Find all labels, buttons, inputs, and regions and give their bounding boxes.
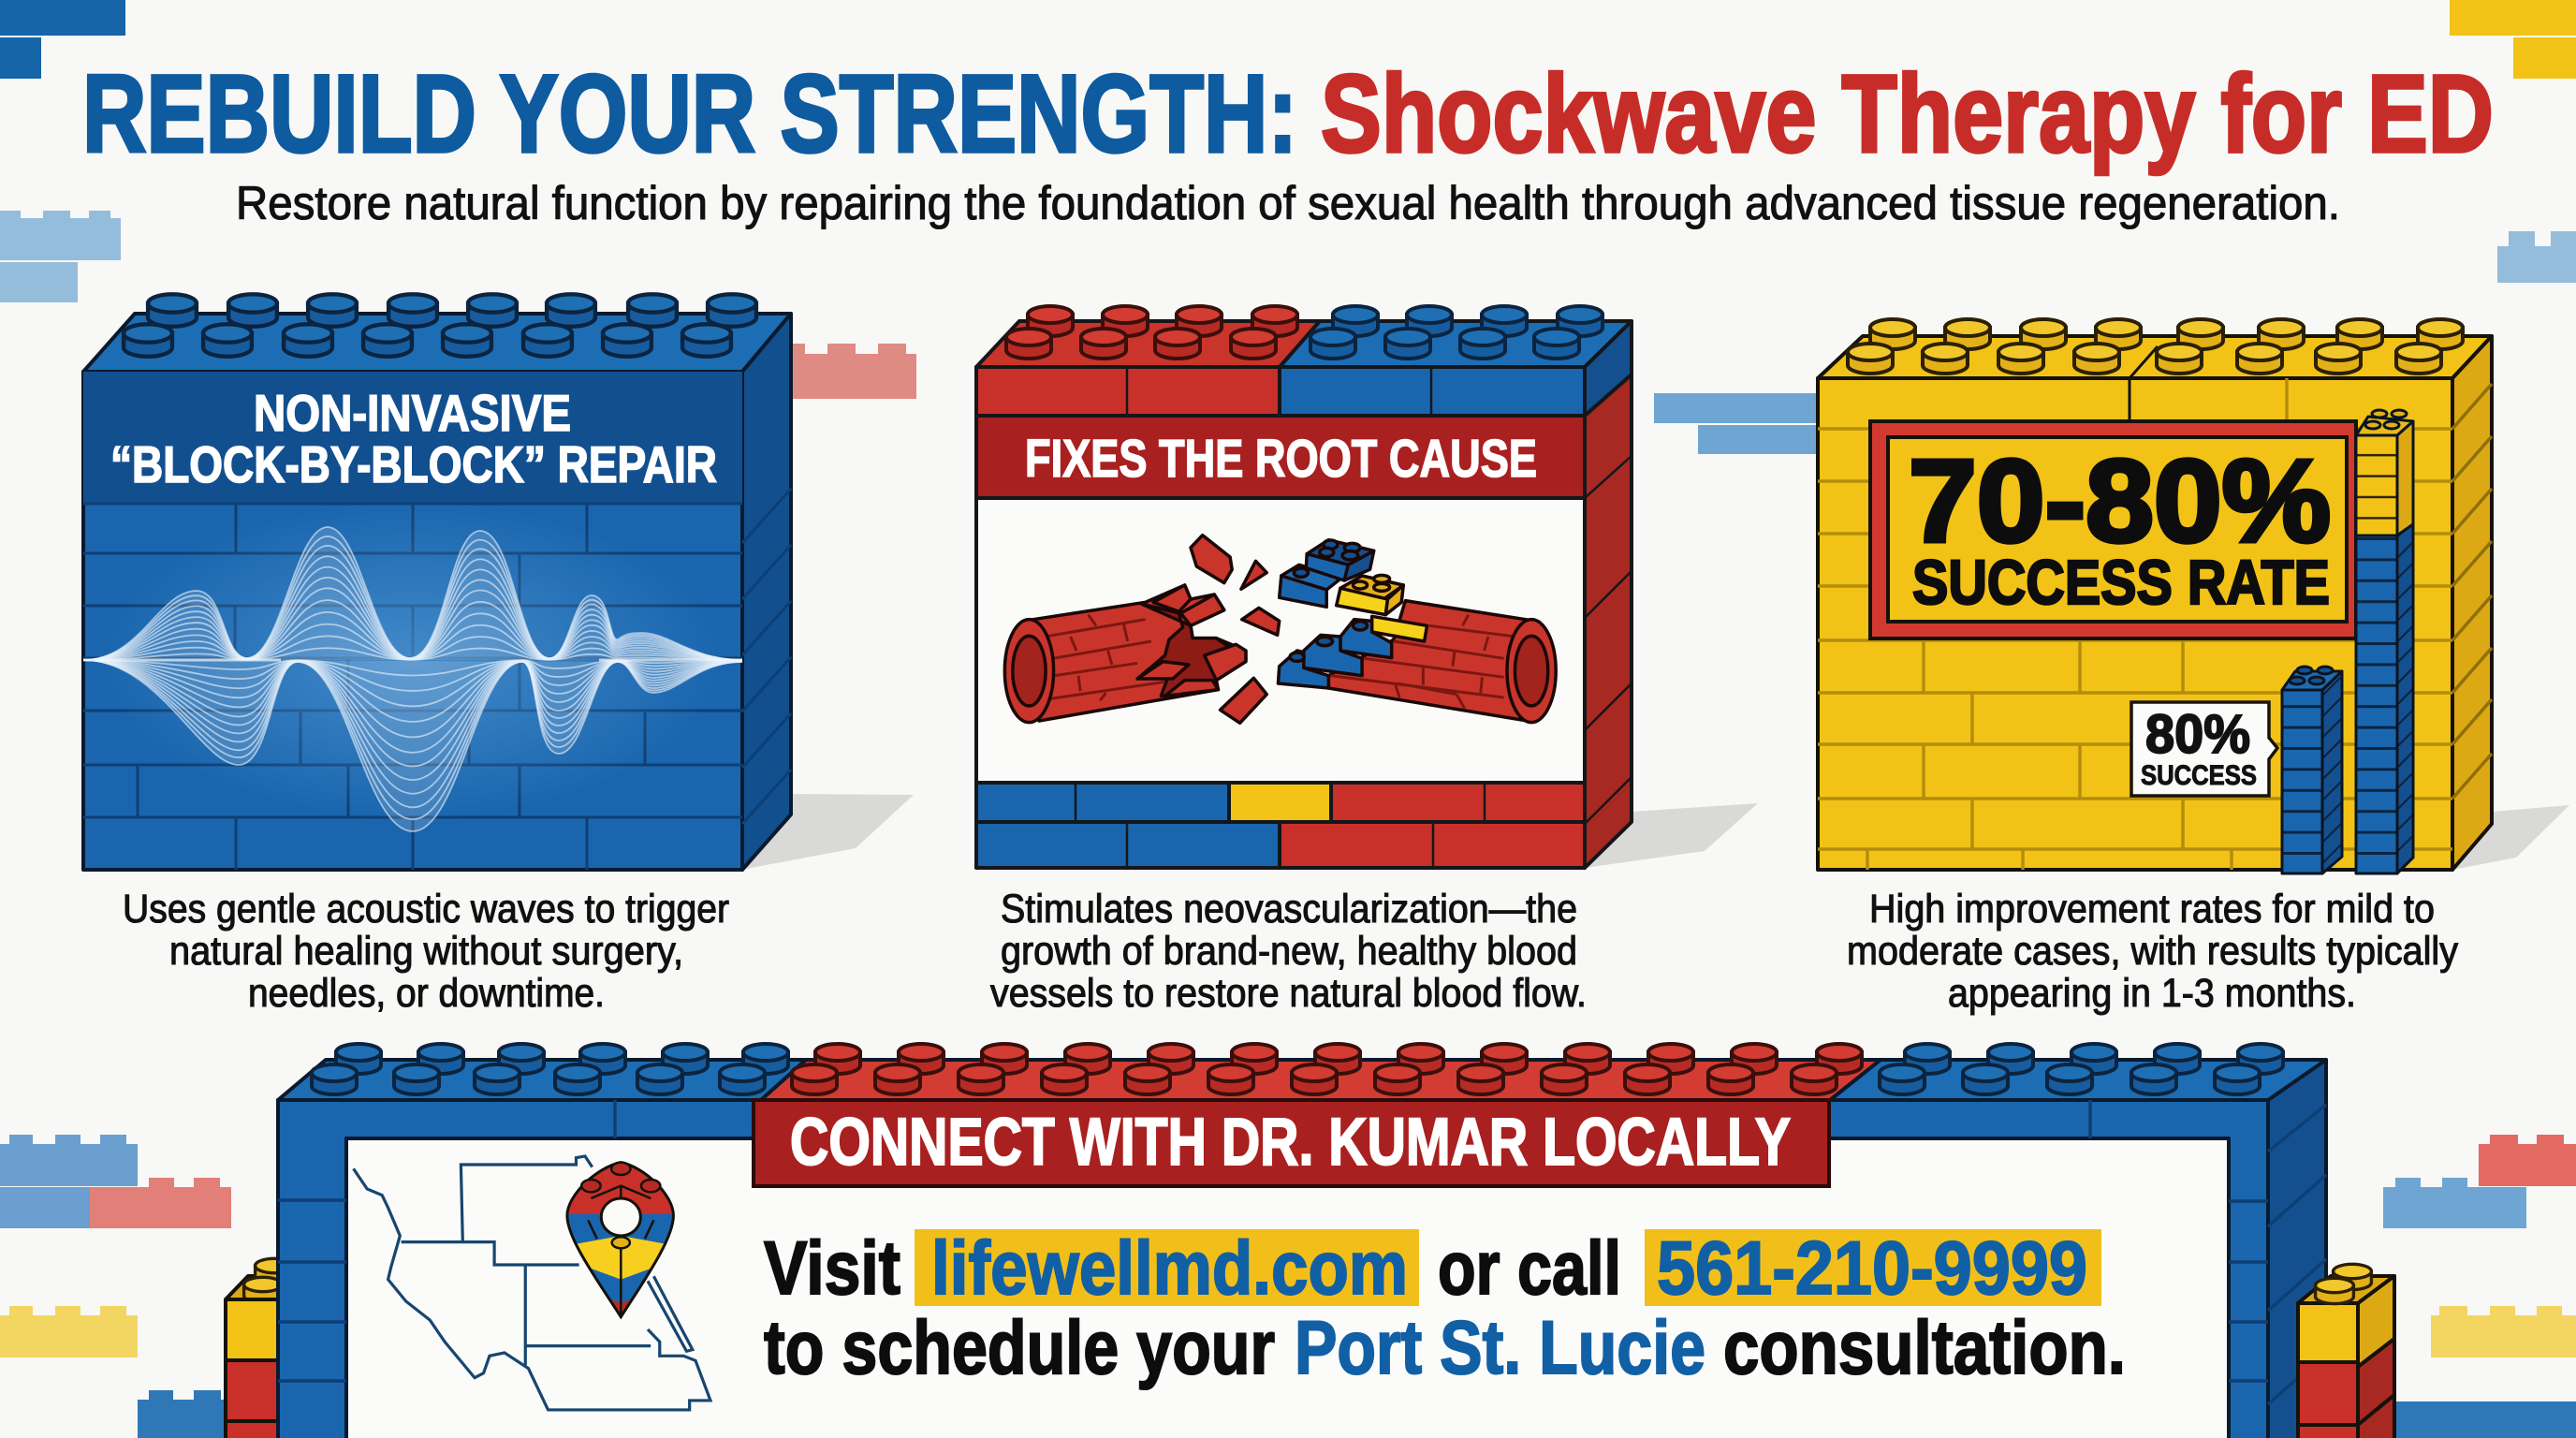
brick block body <box>83 314 791 870</box>
panel: success rate <box>1818 319 2569 873</box>
map of Port St. Lucie area <box>354 1156 710 1410</box>
panel: connect with Dr. Kumar <box>226 1044 2394 1438</box>
caption: panel 1: needles, or downtime. <box>248 971 605 1016</box>
brick lines <box>1818 378 2492 870</box>
callout: 80% success <box>2131 702 2277 796</box>
call to action line 1: Visit <box>764 1226 900 1311</box>
call to action line 2 <box>764 1306 2126 1390</box>
call to action line 1: or call <box>1438 1226 1621 1311</box>
studs <box>124 294 756 357</box>
brick block body <box>976 321 1632 868</box>
call to action line 1 <box>764 1226 2101 1311</box>
heading: FIXES THE ROOT CAUSE <box>1025 429 1537 489</box>
call to action line 2: to schedule your <box>764 1306 1275 1390</box>
caption: panel 3: High improvement rates for mild to <box>1869 887 2435 932</box>
caption: panel 1: natural healing without surgery, <box>169 929 683 974</box>
fragments <box>1191 536 1280 723</box>
title: REBUILD YOUR STRENGTH: <box>82 52 1297 176</box>
right block tower <box>2298 1264 2394 1438</box>
callout: 80% success: SUCCESS <box>2141 760 2257 791</box>
caption: panel 3: moderate cases, with results typically <box>1847 929 2458 974</box>
success rate sign: SUCCESS RATE <box>1912 548 2330 618</box>
success rate sign <box>1870 421 2356 638</box>
brick lines <box>83 489 791 870</box>
panel: non-invasive repair <box>83 294 914 870</box>
call to action line 1: lifewellmd.com <box>931 1226 1408 1311</box>
caption: panel 2 <box>990 887 1587 1016</box>
studs <box>1006 306 1603 359</box>
right vessel <box>1328 601 1556 723</box>
icon: location pin <box>565 1161 675 1320</box>
heading: “BLOCK-BY-BLOCK” REPAIR <box>110 435 717 493</box>
short block tower <box>2282 667 2342 873</box>
banner heading: CONNECT WITH DR. KUMAR LOCALLY <box>790 1106 1791 1180</box>
left block tower <box>226 1258 293 1438</box>
frame brick lines <box>278 1100 2326 1404</box>
callout: 80% success: 80% <box>2145 704 2250 765</box>
title <box>82 52 2494 176</box>
panel: fixes the root cause <box>976 306 1758 868</box>
caption: panel 2: vessels to restore natural blood flow. <box>990 971 1587 1016</box>
caption: panel 2: growth of brand-new, healthy blood <box>1001 929 1577 974</box>
frame body <box>278 1060 2326 1438</box>
shadow <box>1585 803 1758 868</box>
caption: panel 2: Stimulates neovascularization—the <box>1001 887 1577 932</box>
brick block body <box>1818 336 2492 870</box>
heading: NON-INVASIVE <box>254 384 571 442</box>
caption: panel 3: appearing in 1-3 months. <box>1948 971 2356 1016</box>
caption: panel 1: Uses gentle acoustic waves to trigger <box>123 887 729 932</box>
caption: panel 1 <box>123 887 729 1016</box>
shadow <box>742 794 914 869</box>
brick lines <box>1076 367 1632 868</box>
studs <box>312 1044 2283 1094</box>
caption: panel 3 <box>1847 887 2458 1016</box>
acoustic wave <box>83 501 742 831</box>
call to action line 2: Port St. Lucie <box>1295 1306 1705 1390</box>
success rate sign: 70-80% <box>1909 436 2331 566</box>
shadow <box>2452 805 2569 870</box>
call to action line 2: consultation. <box>1723 1306 2126 1390</box>
studs <box>1848 319 2463 374</box>
tall block tower <box>2356 410 2413 873</box>
subtitle: Restore natural function by repairing the foundation of sexual health through advanced tissue regeneration. <box>236 177 2340 229</box>
heading <box>110 384 717 493</box>
icon: broken blood vessel rebuilt with bricks <box>1004 536 1556 723</box>
rebuilding bricks <box>1278 540 1427 688</box>
call to action line 1: 561-210-9999 <box>1657 1226 2087 1311</box>
left vessel <box>1004 585 1246 723</box>
